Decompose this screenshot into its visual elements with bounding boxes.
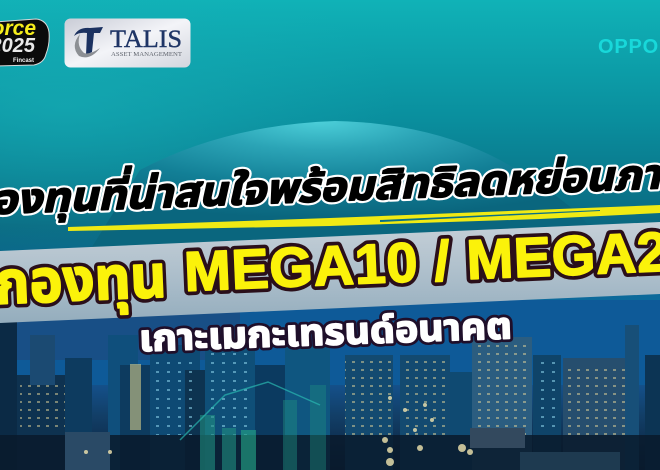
watermark: OPPO: OPPO — [598, 36, 659, 58]
badge: Force 2025: Fincast — [13, 58, 34, 64]
banner band — [0, 222, 660, 323]
city skyline — [0, 300, 660, 470]
subtitle: เกาะเมกะเทรนด์อนาคต — [138, 305, 513, 359]
logo: Talis Asset Management: TALIS — [110, 26, 182, 53]
logo: Talis Asset Management: ASSET MANAGEMENT — [111, 51, 182, 58]
badge: Force 2025 — [0, 17, 49, 66]
icon: Talis T mark — [74, 27, 103, 57]
main title — [0, 218, 660, 320]
planet globe — [90, 121, 600, 250]
subtitle: เกาะเมกะเทรนด์อนาคต — [138, 305, 513, 359]
yellow underline swoosh — [68, 205, 660, 231]
logo: Talis Asset Management — [64, 18, 190, 68]
